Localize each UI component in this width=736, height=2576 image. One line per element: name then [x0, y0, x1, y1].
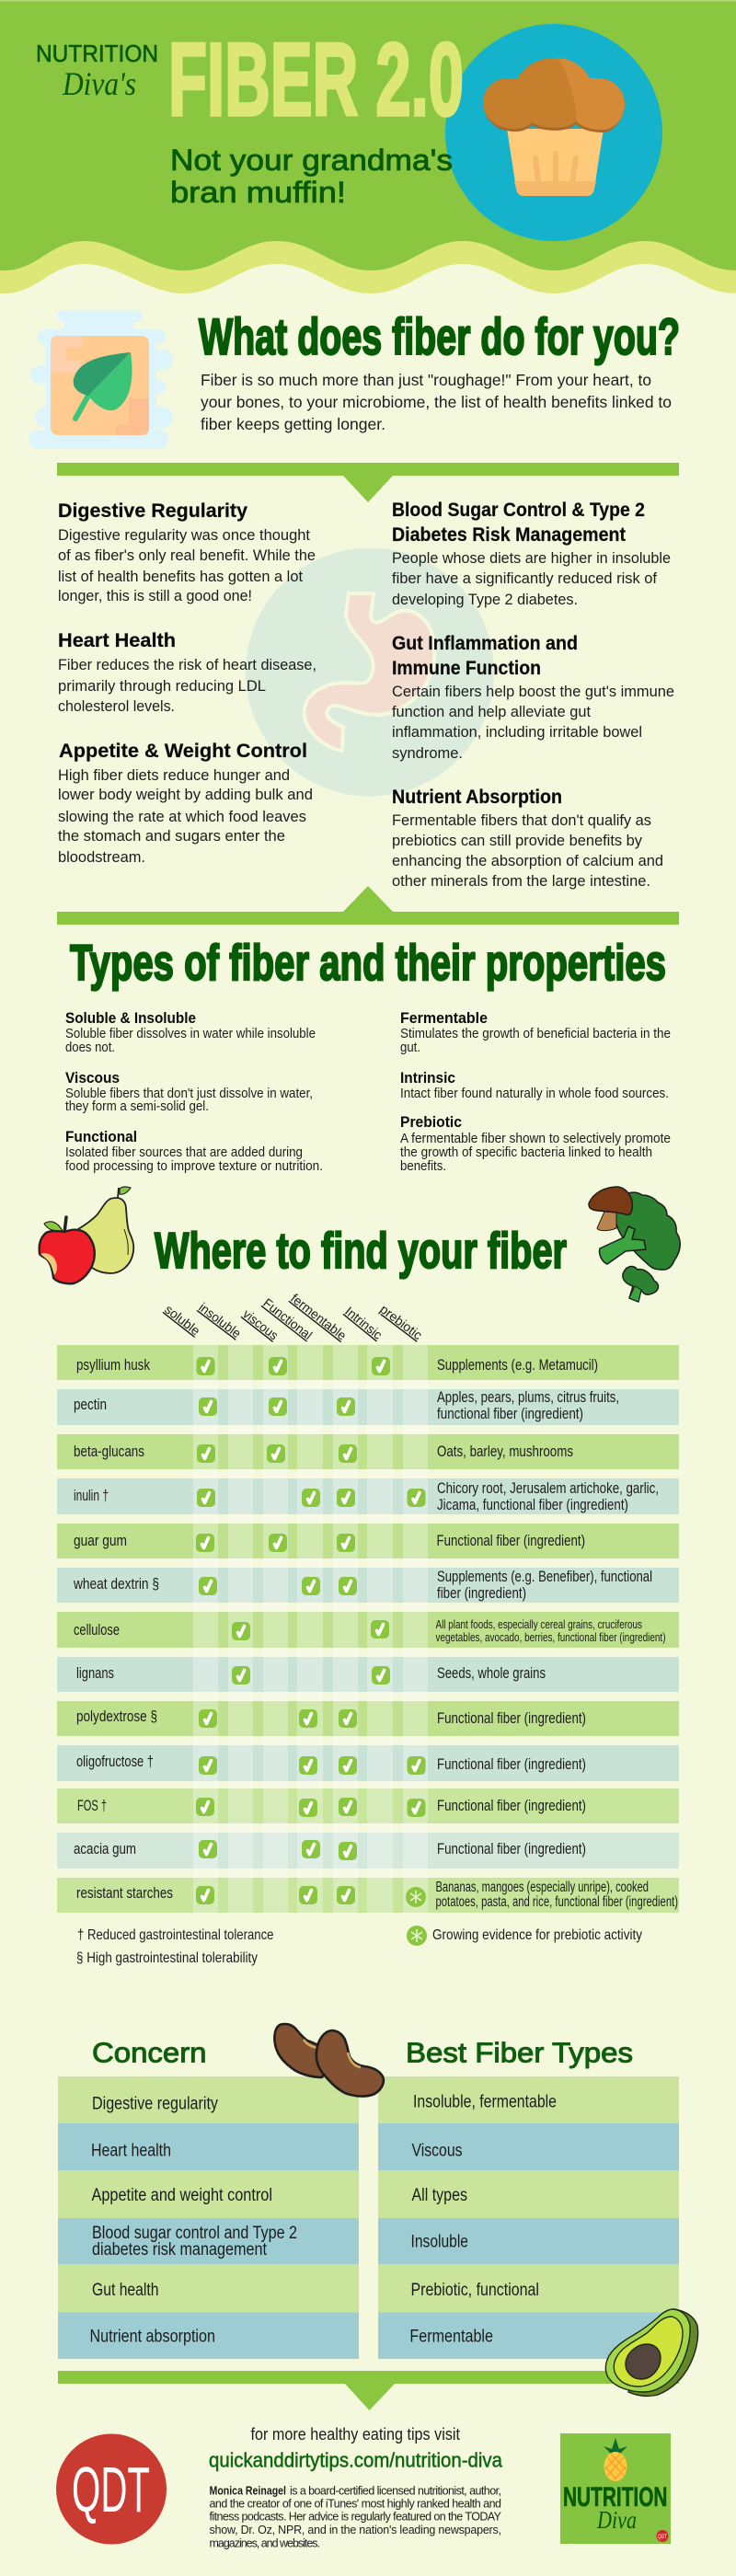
subtitle: bran muffin!	[170, 176, 346, 209]
viscous: they form a semi-solid gel.	[65, 1098, 209, 1114]
viscous	[65, 1070, 313, 1114]
prebiotic: Prebiotic	[400, 1114, 462, 1131]
row: pectin: functional fiber (ingredient)	[437, 1405, 583, 1422]
row: wheat dextrin: fiber (ingredient)	[437, 1584, 526, 1602]
row: wheat dextrin: Supplements (e.g. Benefiber), functional	[437, 1568, 652, 1585]
logo: Nutrition Diva pineapple badge: NUTRITION	[563, 2482, 668, 2513]
blood sugar	[392, 499, 671, 608]
intro paragraph: Fiber is so much more than just "roughage!" From your heart, to	[201, 371, 651, 389]
row: inulin: Chicory root, Jerusalem artichoke, garlic,	[437, 1479, 659, 1497]
row: lignans: Seeds, whole grains	[437, 1664, 546, 1682]
divider with down arrow	[58, 2371, 679, 2410]
intro paragraph	[201, 371, 672, 433]
concern column: Nutrient absorption	[90, 2328, 215, 2347]
table column headers: fermentable	[288, 1291, 350, 1343]
best fiber types column	[409, 2092, 557, 2347]
gut inflammation	[392, 632, 674, 762]
legend: † Reduced gastrointestinal tolerance	[77, 1927, 274, 1943]
row: resistant starches: resistant starches	[76, 1884, 173, 1902]
gut inflammation: inflammation, including irritable bowel	[392, 723, 642, 741]
title: FIBER 2.0	[168, 22, 464, 137]
intro paragraph: your bones, to your microbiome, the list of health benefits linked to	[201, 393, 672, 411]
blood sugar: developing Type 2 diabetes.	[392, 591, 578, 608]
row: resistant starches: Bananas, mangoes (especially unripe), cooked	[436, 1880, 649, 1895]
viscous: Viscous	[65, 1070, 120, 1087]
row: oligofructose	[76, 1753, 586, 1775]
row: acacia gum: acacia gum	[74, 1840, 136, 1857]
appetite and weight control: High fiber diets reduce hunger and	[58, 766, 290, 784]
logo: Nutrition Diva's: Diva's	[62, 65, 136, 102]
row: cellulose: vegetables, avocado, berries, functional fiber (ingredient)	[436, 1630, 666, 1644]
table column headers: insoluble	[196, 1300, 244, 1340]
concern table bands	[58, 2076, 679, 2359]
heart health	[58, 629, 316, 715]
icon: leaf jar	[29, 310, 173, 449]
concern column	[90, 2094, 297, 2347]
icon: broccoli and mushroom	[589, 1187, 680, 1302]
nutrient absorption: enhancing the absorption of calcium and	[392, 852, 663, 869]
heart health: Heart Health	[58, 629, 176, 651]
table column headers: Functional	[260, 1295, 316, 1342]
logo: Nutrition Diva pineapple badge: QDT	[658, 2535, 667, 2540]
heading: concern: Concern	[92, 2037, 206, 2068]
heading: where to find your fiber: Where to find your fiber	[155, 1222, 567, 1279]
soluble and insoluble	[65, 1010, 316, 1055]
author bio: magazines, and websites.	[210, 2537, 320, 2550]
row: psyllium husk	[76, 1356, 598, 1375]
fermentable: Stimulates the growth of beneficial bacteria in the	[400, 1026, 671, 1041]
viscous: Soluble fibers that don't just dissolve in water,	[65, 1086, 313, 1101]
author bio: Monica Reinagel	[210, 2485, 286, 2498]
row: guar gum: guar gum	[74, 1532, 127, 1549]
author bio	[210, 2485, 502, 2550]
author bio: and the creator of one of iTunes' most highly ranked health and	[210, 2498, 501, 2511]
heading: best fiber types: Best Fiber Types	[406, 2037, 633, 2068]
row: lignans	[76, 1664, 546, 1685]
panel: fiber type definitions right	[400, 1010, 671, 1174]
logo: Nutrition Diva pineapple badge	[560, 2433, 671, 2544]
row: pectin: Apples, pears, plums, citrus fruits,	[437, 1388, 619, 1406]
appetite and weight control: the stomach and sugars enter the	[58, 827, 285, 845]
functional: Isolated fiber sources that are added during	[65, 1144, 303, 1160]
concern column: Gut health	[92, 2281, 158, 2300]
gut inflammation: function and help alleviate gut	[392, 703, 591, 720]
best fiber types column: Viscous	[412, 2142, 462, 2160]
footer call to action: for more healthy eating tips visit	[250, 2424, 460, 2444]
gut inflammation: syndrome.	[392, 744, 463, 762]
subtitle: Not your grandma's	[170, 144, 453, 177]
row: polydextrose: polydextrose §	[76, 1708, 157, 1725]
appetite and weight control: lower body weight by adding bulk and	[58, 786, 313, 803]
gut inflammation: Gut Inflammation and	[392, 632, 578, 654]
row: beta-glucans: beta-glucans	[74, 1443, 144, 1460]
icon: pear and apple	[40, 1187, 133, 1283]
digestive regularity: Digestive Regularity	[58, 500, 247, 522]
row: wheat dextrin: wheat dextrin §	[73, 1575, 159, 1593]
table column headers: Intrinsic	[342, 1304, 385, 1342]
digestive regularity: Digestive regularity was once thought	[58, 526, 310, 544]
footer link: quickanddirtytips.com/nutrition-diva	[209, 2449, 503, 2471]
row: FOS: Functional fiber (ingredient)	[437, 1797, 586, 1814]
appetite and weight control: slowing the rate at which food leaves	[58, 808, 306, 825]
row: wheat dextrin	[73, 1568, 652, 1602]
concern column: Heart health	[91, 2142, 171, 2160]
soluble and insoluble: Soluble & Insoluble	[65, 1010, 196, 1027]
row: beta-glucans	[74, 1443, 573, 1463]
appetite and weight control	[58, 740, 313, 866]
best fiber types column: Insoluble, fermentable	[413, 2092, 557, 2112]
best fiber types column: All types	[412, 2186, 467, 2205]
prebiotic: the growth of specific bacteria linked to health	[400, 1144, 652, 1160]
concern column: Digestive regularity	[92, 2094, 218, 2114]
appetite and weight control: bloodstream.	[58, 848, 145, 866]
row: psyllium husk: Supplements (e.g. Metamucil)	[437, 1356, 598, 1374]
row: acacia gum	[74, 1840, 586, 1860]
background circle	[246, 548, 494, 797]
logo: Nutrition Diva pineapple badge: Diva	[596, 2506, 637, 2534]
header banner with wave	[0, 0, 736, 293]
table column headers: viscous	[240, 1306, 282, 1342]
panel: fiber type definitions left	[65, 1010, 323, 1174]
row: oligofructose: Functional fiber (ingredient)	[437, 1755, 586, 1773]
prebiotic: A fermentable fiber shown to selectively promote	[400, 1131, 671, 1146]
concern column: diabetes risk management	[92, 2240, 268, 2260]
prebiotic: benefits.	[400, 1158, 446, 1174]
subtitle	[170, 144, 453, 209]
functional: food processing to improve texture or nutrition.	[65, 1158, 323, 1174]
row: FOS: FOS †	[77, 1797, 107, 1814]
row: oligofructose: oligofructose †	[76, 1753, 154, 1770]
row: cellulose: All plant foods, especially cereal grains, cruciferous	[436, 1617, 642, 1631]
row: cellulose	[74, 1617, 666, 1644]
icon: kidney beans	[274, 2024, 384, 2097]
legend: Growing evidence for prebiotic activity	[432, 1927, 642, 1943]
gut inflammation: Immune Function	[392, 657, 541, 679]
row: polydextrose: Functional fiber (ingredient)	[437, 1709, 586, 1727]
heart health: primarily through reducing LDL	[58, 677, 266, 695]
table column headers: prebiotic	[377, 1302, 425, 1342]
soluble and insoluble: Soluble fiber dissolves in water while insoluble	[65, 1026, 316, 1041]
row: pectin: pectin	[74, 1396, 107, 1413]
functional	[65, 1129, 323, 1174]
nutrient absorption: Nutrient Absorption	[392, 786, 562, 808]
logo: Nutrition Diva's	[36, 40, 158, 102]
panel: right benefits	[392, 499, 674, 890]
legend	[76, 1926, 642, 1966]
soluble and insoluble: does not.	[65, 1040, 115, 1055]
row: pectin	[74, 1388, 619, 1422]
row: psyllium husk: psyllium husk	[76, 1356, 150, 1374]
author bio: is a board-certified licensed nutritionist, author,	[290, 2485, 501, 2498]
row: cellulose: cellulose	[74, 1621, 120, 1639]
icon: avocado	[605, 2309, 698, 2396]
blood sugar: Diabetes Risk Management	[392, 523, 626, 546]
intrinsic: Intact fiber found naturally in whole food sources.	[400, 1086, 669, 1101]
blood sugar: People whose diets are higher in insoluble	[392, 549, 671, 567]
table column headers	[162, 1291, 425, 1343]
row: inulin: inulin †	[74, 1487, 109, 1504]
heart health: Fiber reduces the risk of heart disease,	[58, 656, 316, 673]
row: acacia gum: Functional fiber (ingredient)	[437, 1840, 586, 1857]
concern column: Appetite and weight control	[92, 2186, 272, 2205]
row: inulin: Jicama, functional fiber (ingredient)	[437, 1496, 628, 1513]
digestive regularity: list of health benefits has gotten a lot	[58, 568, 303, 585]
icon: muffin on blue circle	[445, 24, 662, 241]
logo: QDT circle	[56, 2434, 167, 2545]
table row bands	[57, 1345, 679, 1913]
nutrient absorption	[392, 786, 663, 890]
row: guar gum: Functional fiber (ingredient)	[436, 1532, 585, 1549]
gut inflammation: Certain fibers help boost the gut's immune	[392, 683, 674, 700]
author bio: fitness podcasts. Her advice is regularly featured on the TODAY	[210, 2511, 502, 2524]
fermentable: gut.	[400, 1040, 420, 1055]
heart health: cholesterol levels.	[58, 697, 175, 715]
divider with up arrow	[57, 886, 679, 925]
row: beta-glucans: Oats, barley, mushrooms	[437, 1443, 573, 1460]
legend: § High gastrointestinal tolerability	[76, 1950, 258, 1966]
panel: left benefits	[58, 500, 316, 866]
row: FOS	[77, 1797, 586, 1817]
best fiber types column: Fermentable	[409, 2328, 493, 2347]
fermentable	[400, 1010, 671, 1055]
digestive regularity: of as fiber's only real benefit. While the	[58, 546, 316, 564]
functional: Functional	[65, 1129, 137, 1145]
digestive regularity: longer, this is still a good one!	[58, 587, 252, 604]
logo: QDT circle: QDT	[72, 2454, 150, 2525]
best fiber types column: Prebiotic, functional	[410, 2281, 539, 2300]
nutrient absorption: other minerals from the large intestine.	[392, 872, 650, 890]
row: lignans: lignans	[76, 1664, 114, 1682]
best fiber types column: Insoluble	[410, 2232, 468, 2251]
icon: stomach	[305, 593, 434, 751]
row: guar gum	[74, 1532, 585, 1552]
logo: Nutrition Diva's: NUTRITION	[36, 40, 158, 67]
table column headers: soluble	[162, 1302, 203, 1339]
row: resistant starches	[76, 1880, 678, 1910]
blood sugar: Blood Sugar Control & Type 2	[392, 499, 645, 521]
intro paragraph: fiber keeps getting longer.	[201, 415, 385, 433]
prebiotic	[400, 1114, 671, 1174]
row: polydextrose	[76, 1708, 586, 1728]
appetite and weight control: Appetite & Weight Control	[59, 740, 307, 762]
intrinsic	[400, 1070, 669, 1101]
digestive regularity	[58, 500, 316, 604]
nutrient absorption: prebiotics can still provide benefits by	[392, 832, 642, 849]
fermentable: Fermentable	[400, 1010, 488, 1027]
row: inulin	[74, 1479, 659, 1513]
nutrient absorption: Fermentable fibers that don't qualify as	[392, 811, 651, 829]
concern column: Blood sugar control and Type 2	[92, 2224, 297, 2243]
blood sugar: fiber have a significantly reduced risk of	[392, 569, 657, 587]
author bio: show, Dr. Oz, NPR, and in the nation's leading newspapers,	[210, 2524, 501, 2536]
intrinsic: Intrinsic	[400, 1070, 455, 1087]
divider with down arrow	[57, 463, 679, 502]
